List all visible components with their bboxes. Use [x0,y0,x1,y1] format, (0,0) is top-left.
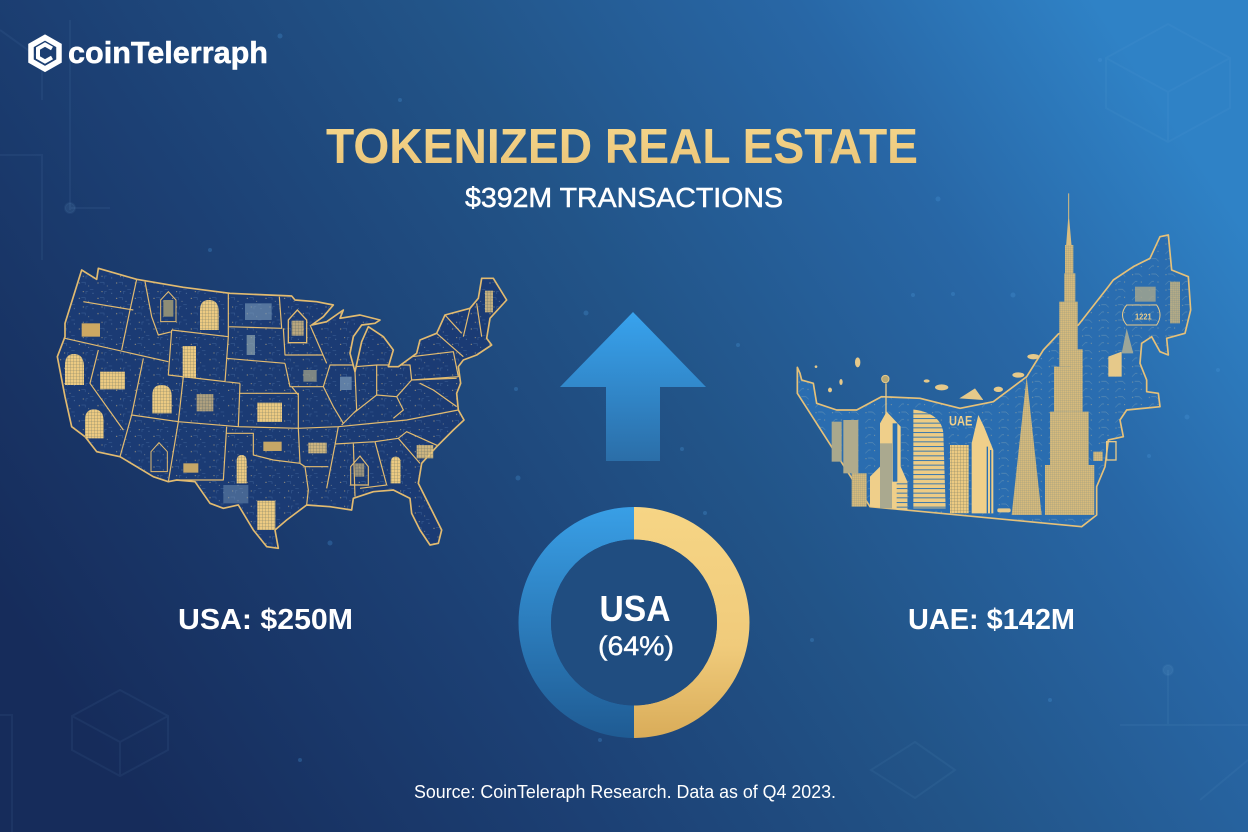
UAE map label: UAE [949,413,972,429]
donut chart [518,507,750,738]
source note: Source: CoinTeleraph Research. Data as of Q4 2023. [414,782,836,802]
UAE map [797,193,1191,527]
label: UAE value: UAE: $142M [908,604,1075,636]
donut segment: blue [518,507,634,738]
label: USA value: USA: $250M [178,604,353,636]
UAE islands [815,354,1039,400]
donut segment: gold [634,507,750,738]
skyline buildings: 1221 [1135,311,1152,321]
UAE outline and texture [797,235,1191,527]
USA map [57,268,507,548]
background particles [208,34,1220,762]
title: TOKENIZED REAL ESTATE [326,120,918,174]
USA outline and texture [57,268,507,548]
skyline buildings [832,193,1180,515]
logo [31,35,268,70]
donut chart: (64%) [598,631,674,661]
donut centre [551,540,717,706]
state borders [65,279,482,505]
logo icon: hexagon [31,38,59,69]
donut label: USA [600,588,670,629]
building icons [65,291,493,530]
logo wordmark: coinTelerraph [68,35,268,70]
subtitle: $392M TRANSACTIONS [465,182,783,213]
arrow up [560,312,706,461]
